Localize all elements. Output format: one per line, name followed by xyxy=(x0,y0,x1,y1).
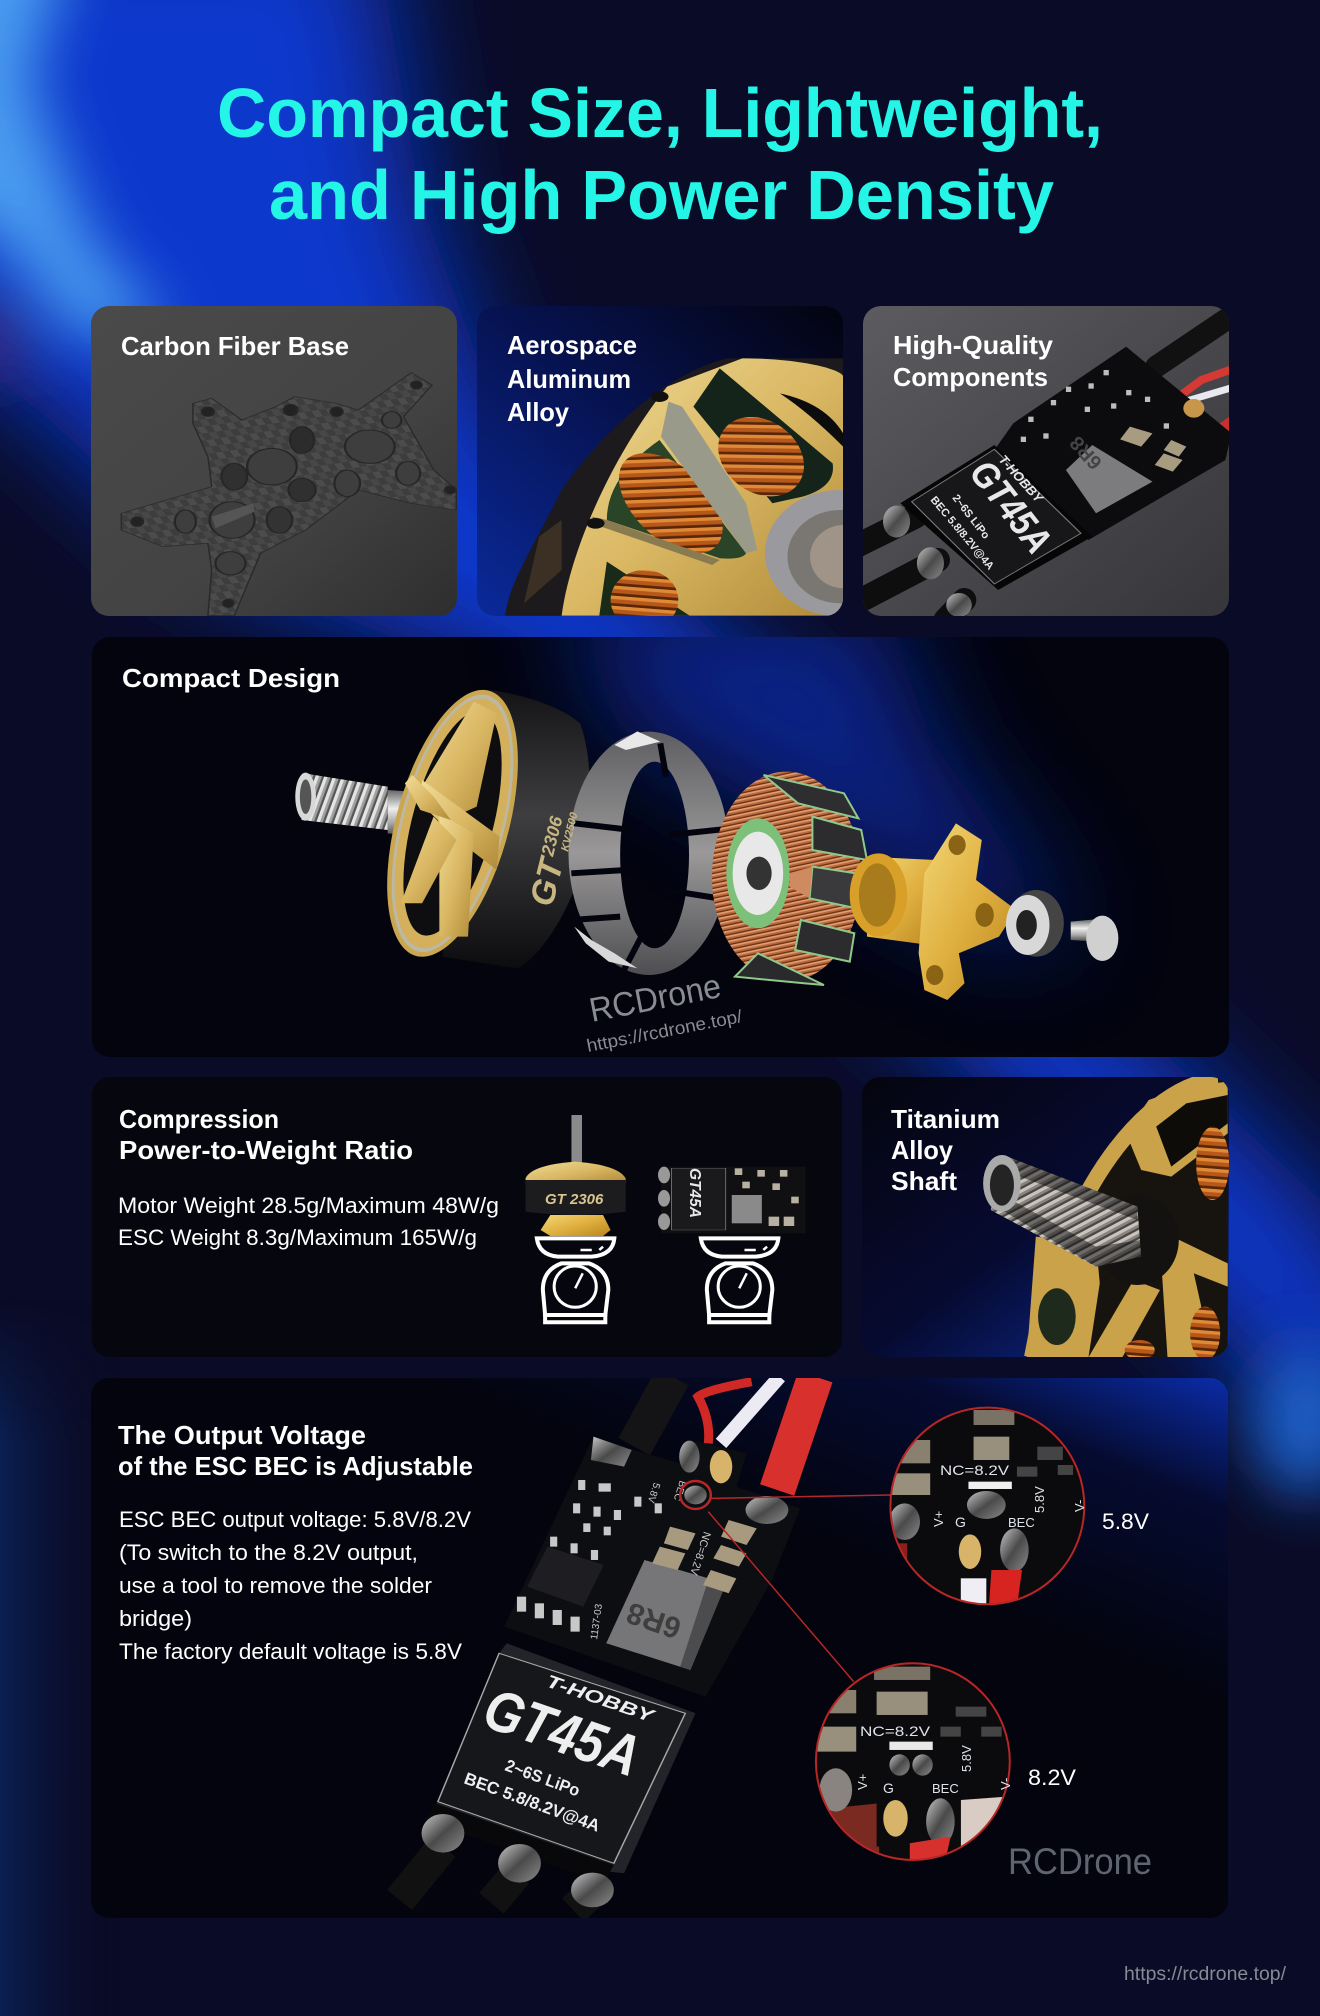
footer url: https://rcdrone.top/ xyxy=(1124,1964,1287,1985)
gold base xyxy=(850,823,1016,1000)
callout 5.8V board markings: V+ xyxy=(931,1511,946,1527)
callout 8.2V board markings: BEC xyxy=(932,1781,959,1796)
image: large ESC board xyxy=(400,1377,815,1910)
callout: 8.2V open bridge close-up xyxy=(815,1663,1010,1860)
text: BEC output description: (To switch to the 8.2V output, xyxy=(119,1540,418,1565)
image: titanium shaft and rotor xyxy=(983,1078,1229,1360)
text: weight figures: Motor Weight 28.5g/Maximum 48W/g xyxy=(118,1193,499,1218)
motor bell xyxy=(387,690,590,968)
callout 8.2V board markings: NC=8.2V xyxy=(860,1723,931,1739)
icon: weighing scale for ESC xyxy=(701,1238,778,1322)
image: carbon fiber star plate xyxy=(121,373,456,616)
callout 8.2V board markings xyxy=(855,1723,1013,1796)
ESC label text xyxy=(928,431,1107,572)
heading: aerospace aluminum alloy: Aluminum xyxy=(507,364,631,394)
panel: high-quality components xyxy=(855,306,1239,620)
heading: titanium alloy shaft: Shaft xyxy=(891,1166,957,1196)
bearing xyxy=(1006,890,1064,957)
watermark: RCDrone xyxy=(585,967,744,1056)
text: weight figures xyxy=(118,1193,499,1250)
heading: adjustable output voltage xyxy=(118,1420,473,1481)
ESC label text: BEC xyxy=(671,1479,688,1502)
callout 5.8V board markings xyxy=(931,1462,1087,1530)
callout 5.8V board markings: 5.8V xyxy=(1032,1486,1047,1513)
heading: adjustable output voltage: of the ESC BEC is Adjustable xyxy=(118,1451,473,1481)
ESC label text: GT45A xyxy=(476,1676,648,1789)
icon: weighing scale for motor xyxy=(537,1238,614,1322)
watermark: RCDrone: https://rcdrone.top/ xyxy=(585,1006,744,1056)
heading: titanium alloy shaft: Titanium xyxy=(891,1104,1000,1134)
callout 5.8V board markings: NC=8.2V xyxy=(940,1462,1010,1478)
ESC label text: GT45A xyxy=(961,453,1059,562)
motor bell branding: GT xyxy=(523,852,572,910)
panel: compact design xyxy=(92,637,1229,1057)
callout lines and marker xyxy=(680,1481,892,1682)
ESC label text: 2~6S LiPo xyxy=(950,492,992,542)
panel: carbon fiber base xyxy=(91,306,457,616)
text: BEC output description: The factory default voltage is 5.8V xyxy=(119,1639,462,1664)
text: BEC output description xyxy=(119,1507,471,1664)
heading: high-quality components xyxy=(893,330,1054,392)
motor bell branding: KV2500 xyxy=(559,810,581,853)
ESC label text: 1137-03 xyxy=(589,1603,605,1640)
heading: power-to-weight ratio: Compression xyxy=(119,1104,279,1134)
ESC label text: NC=8.2V xyxy=(687,1530,713,1577)
ESC label text: 2~6S LiPo xyxy=(503,1756,582,1800)
text: weight figures: ESC Weight 8.3g/Maximum 165W/g xyxy=(118,1225,477,1250)
callout 5.8V board markings: V- xyxy=(1072,1500,1087,1512)
heading: titanium alloy shaft xyxy=(891,1104,1000,1196)
motor shaft xyxy=(295,772,404,834)
ESC label text: T-HOBBY xyxy=(996,452,1047,506)
small ESC label: GT45A xyxy=(686,1168,703,1218)
ESC label text: BEC 5.8/8.2V@4A xyxy=(928,494,996,572)
screw xyxy=(1071,916,1118,961)
stator xyxy=(712,772,867,985)
panel: aerospace aluminum alloy xyxy=(477,306,843,616)
board components xyxy=(652,1520,757,1593)
heading: high-quality components: High-Quality xyxy=(893,330,1054,360)
motor bell branding xyxy=(523,810,581,910)
ESC label text xyxy=(462,1479,713,1836)
callout 5.8V board markings: BEC xyxy=(1008,1515,1035,1530)
title: Compact Size, Lightweight, xyxy=(217,74,1103,152)
callout 5.8V board markings: G xyxy=(955,1514,966,1530)
image: ESC board xyxy=(855,313,1239,620)
ESC label text: 6R8 xyxy=(622,1595,685,1645)
heading: compact design: Compact Design xyxy=(122,663,340,693)
heading: aerospace aluminum alloy: Aerospace xyxy=(507,330,637,360)
ESC label text: 6R8 xyxy=(1066,431,1107,473)
magnet ring xyxy=(568,731,732,975)
panel: adjustable ESC BEC output voltage xyxy=(91,1377,1228,1918)
panel: titanium alloy shaft xyxy=(862,1077,1229,1360)
small motor label: GT 2306 xyxy=(545,1191,604,1208)
panel: compression power-to-weight ratio xyxy=(92,1077,842,1357)
heading: aerospace aluminum alloy: Alloy xyxy=(507,397,570,427)
heading: aerospace aluminum alloy xyxy=(507,330,637,427)
text: BEC output description: ESC BEC output voltage: 5.8V/8.2V xyxy=(119,1507,471,1532)
callout: 5.8V solder bridge close-up xyxy=(889,1408,1084,1608)
callout 8.2V board markings: V- xyxy=(998,1778,1013,1790)
image: small motor xyxy=(526,1115,626,1236)
heading: adjustable output voltage: The Output Voltage xyxy=(118,1420,366,1450)
heading: titanium alloy shaft: Alloy xyxy=(891,1135,954,1165)
label: 8.2V: 8.2V xyxy=(1028,1765,1076,1790)
image: small ESC xyxy=(658,1167,806,1233)
label: 5.8V: 5.8V xyxy=(1102,1509,1149,1534)
motor bell branding: 2306 xyxy=(537,813,567,859)
heading: high-quality components: Components xyxy=(893,362,1048,392)
callout 8.2V board markings: G xyxy=(883,1780,894,1796)
ESC label text: BEC 5.8/8.2V@4A xyxy=(462,1769,603,1836)
text: BEC output description: use a tool to remove the solder xyxy=(119,1573,432,1598)
title xyxy=(217,74,1103,234)
watermark: RCDrone: RCDrone xyxy=(586,967,724,1030)
text: BEC output description: bridge) xyxy=(119,1606,192,1631)
ESC label text: 5.8V xyxy=(645,1481,662,1504)
inductor xyxy=(606,1560,726,1670)
heading: power-to-weight ratio: Power-to-Weight Ratio xyxy=(119,1135,413,1165)
watermark: RCDrone: RCDrone xyxy=(1008,1841,1152,1882)
callout 8.2V board markings: 5.8V xyxy=(959,1745,974,1772)
heading: power-to-weight ratio xyxy=(119,1104,413,1165)
image: aluminium motor close-up xyxy=(505,358,843,616)
title: and High Power Density xyxy=(269,156,1054,234)
callout 8.2V board markings: V+ xyxy=(855,1774,870,1790)
heading: carbon fiber base: Carbon Fiber Base xyxy=(121,331,349,361)
ESC label text: T-HOBBY xyxy=(544,1671,659,1727)
image: exploded motor xyxy=(295,685,1118,1000)
